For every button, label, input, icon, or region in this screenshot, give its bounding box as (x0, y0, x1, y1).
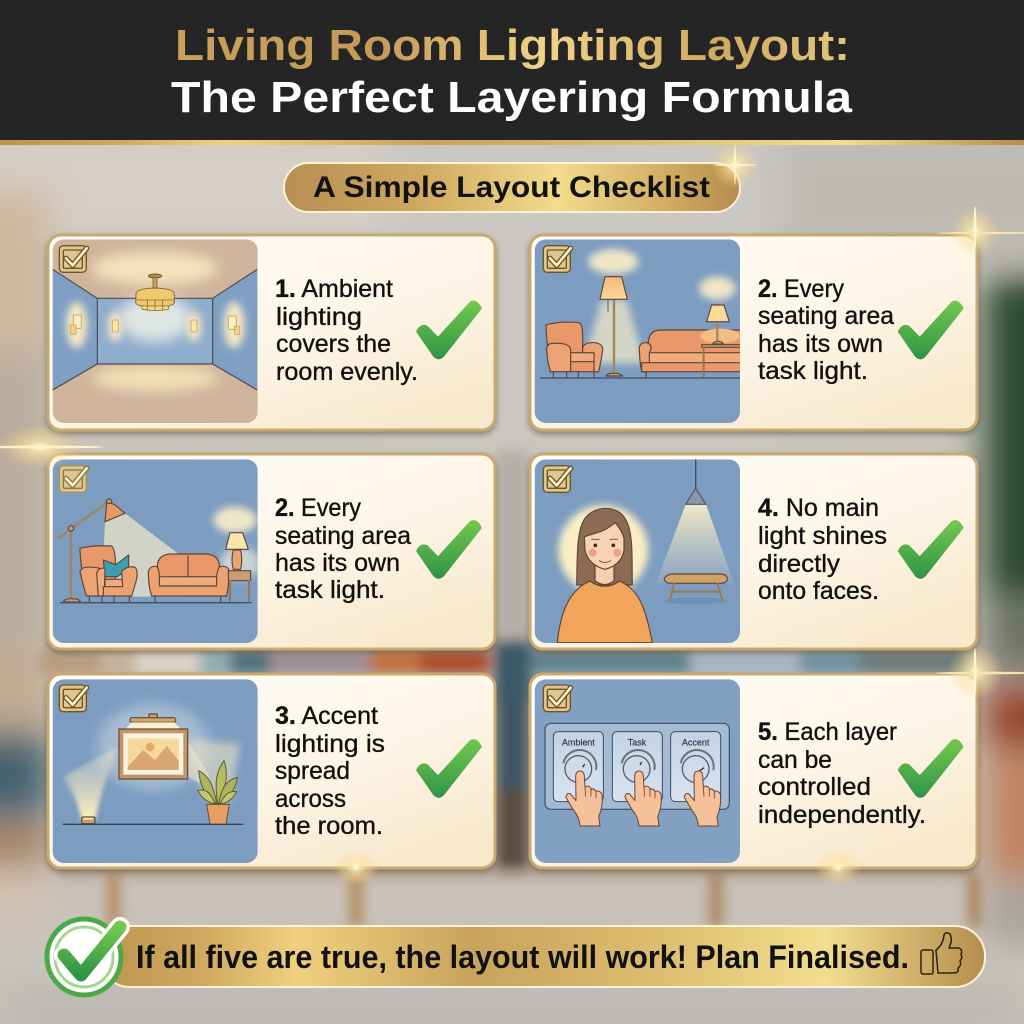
card text: lighting (276, 303, 362, 331)
armchair (546, 322, 603, 377)
card text (758, 718, 926, 829)
sofa (639, 329, 747, 377)
card text: can be (758, 746, 832, 774)
side table and lamp (226, 533, 251, 602)
hand 1 (566, 771, 602, 826)
card text: seating area (758, 302, 894, 330)
Task switch (612, 732, 662, 802)
subtitle pill: A Simple Layout Checklist (313, 171, 710, 204)
reading floor lamp (58, 499, 125, 602)
illustration: room with ceiling light and sconces (53, 239, 258, 423)
illustration: armchair, floor lamp, sofa, table lamp (535, 239, 747, 423)
pendant (686, 459, 706, 504)
card 2: seating task light (floor lamp) (530, 235, 977, 430)
green check (416, 739, 482, 798)
card text: independently. (758, 801, 926, 829)
illustration: reading lamp, armchair, sofa, side table (53, 459, 260, 643)
card 6: independent controls (530, 674, 977, 868)
table legs (60, 870, 981, 927)
icon: big green check badge (47, 919, 121, 995)
checkbox icon (543, 466, 571, 492)
hand 3 (684, 771, 721, 826)
card 4: no light on faces (530, 454, 977, 649)
card text: 1. Ambient (275, 275, 393, 303)
footer banner (47, 919, 985, 995)
hand 2 (625, 771, 661, 826)
side table and table lamp (702, 305, 742, 377)
title line 1: Living Room Lighting Layout: (175, 21, 850, 70)
green check (898, 739, 964, 798)
picture light (125, 714, 182, 729)
card text (758, 494, 887, 605)
card text: 2. Every (758, 275, 844, 303)
blurred sofa band (40, 450, 970, 870)
Ambient switch: Ambient (562, 738, 595, 748)
icon: thumbs up (921, 933, 962, 974)
card text: onto faces. (758, 577, 879, 605)
checkbox icon (59, 466, 87, 492)
woman (557, 508, 652, 643)
card text: lighting is (275, 730, 385, 758)
card text: directly (758, 550, 841, 578)
card text: seating area (275, 522, 411, 550)
checkbox icon (59, 246, 87, 272)
card text: 5. Each layer (758, 718, 897, 746)
card 5: accent lighting (48, 674, 495, 868)
Accent switch: Accent (682, 738, 710, 748)
card text: 4. No main (758, 494, 879, 522)
title header band (0, 0, 1024, 145)
sparkles (0, 141, 1024, 886)
title line 2: The Perfect Layering Formula (171, 73, 853, 122)
Accent switch (671, 732, 721, 802)
green check (416, 301, 482, 359)
illustration: woman with soft halo, pendant light over bench (535, 459, 740, 643)
subtitle pill (284, 163, 740, 212)
card text: room evenly. (276, 358, 418, 386)
card text (275, 275, 418, 386)
card text: task light. (275, 576, 385, 604)
card text: the room. (275, 812, 383, 840)
floor lamp (600, 277, 627, 376)
card text: controlled (758, 773, 871, 801)
checkbox icon (543, 246, 571, 272)
framed picture (119, 729, 188, 779)
green check (416, 520, 482, 579)
card text: 2. Every (275, 494, 361, 522)
card text (275, 702, 385, 840)
card text: covers the (276, 330, 391, 358)
plant (198, 761, 238, 824)
card text (275, 494, 411, 604)
Task switch: Task (628, 738, 647, 748)
green check (898, 301, 964, 359)
card 3: seating task light (reading lamp) (48, 454, 495, 649)
card text: across (275, 785, 346, 813)
illustration: framed art, picture light, uplight, plant (53, 679, 258, 863)
Ambient switch (553, 732, 603, 802)
green check (898, 520, 964, 579)
card 1: ambient lighting (48, 235, 495, 430)
illustration: three dimmer switches (535, 679, 740, 863)
card text: spread (275, 757, 350, 785)
checkbox icon (59, 685, 87, 712)
card text: task light. (758, 357, 868, 385)
card text: light shines (758, 522, 887, 550)
card text (758, 275, 894, 385)
loveseat (148, 554, 229, 602)
armchair with book (80, 546, 137, 602)
card text: has its own (275, 549, 400, 577)
card text: 3. Accent (275, 702, 378, 730)
uplight (82, 817, 95, 824)
bench (664, 574, 727, 604)
footer text: If all five are true, the layout will work! Plan Finalised. (136, 939, 909, 975)
checkbox icon (543, 685, 571, 712)
card text: has its own (758, 330, 883, 358)
